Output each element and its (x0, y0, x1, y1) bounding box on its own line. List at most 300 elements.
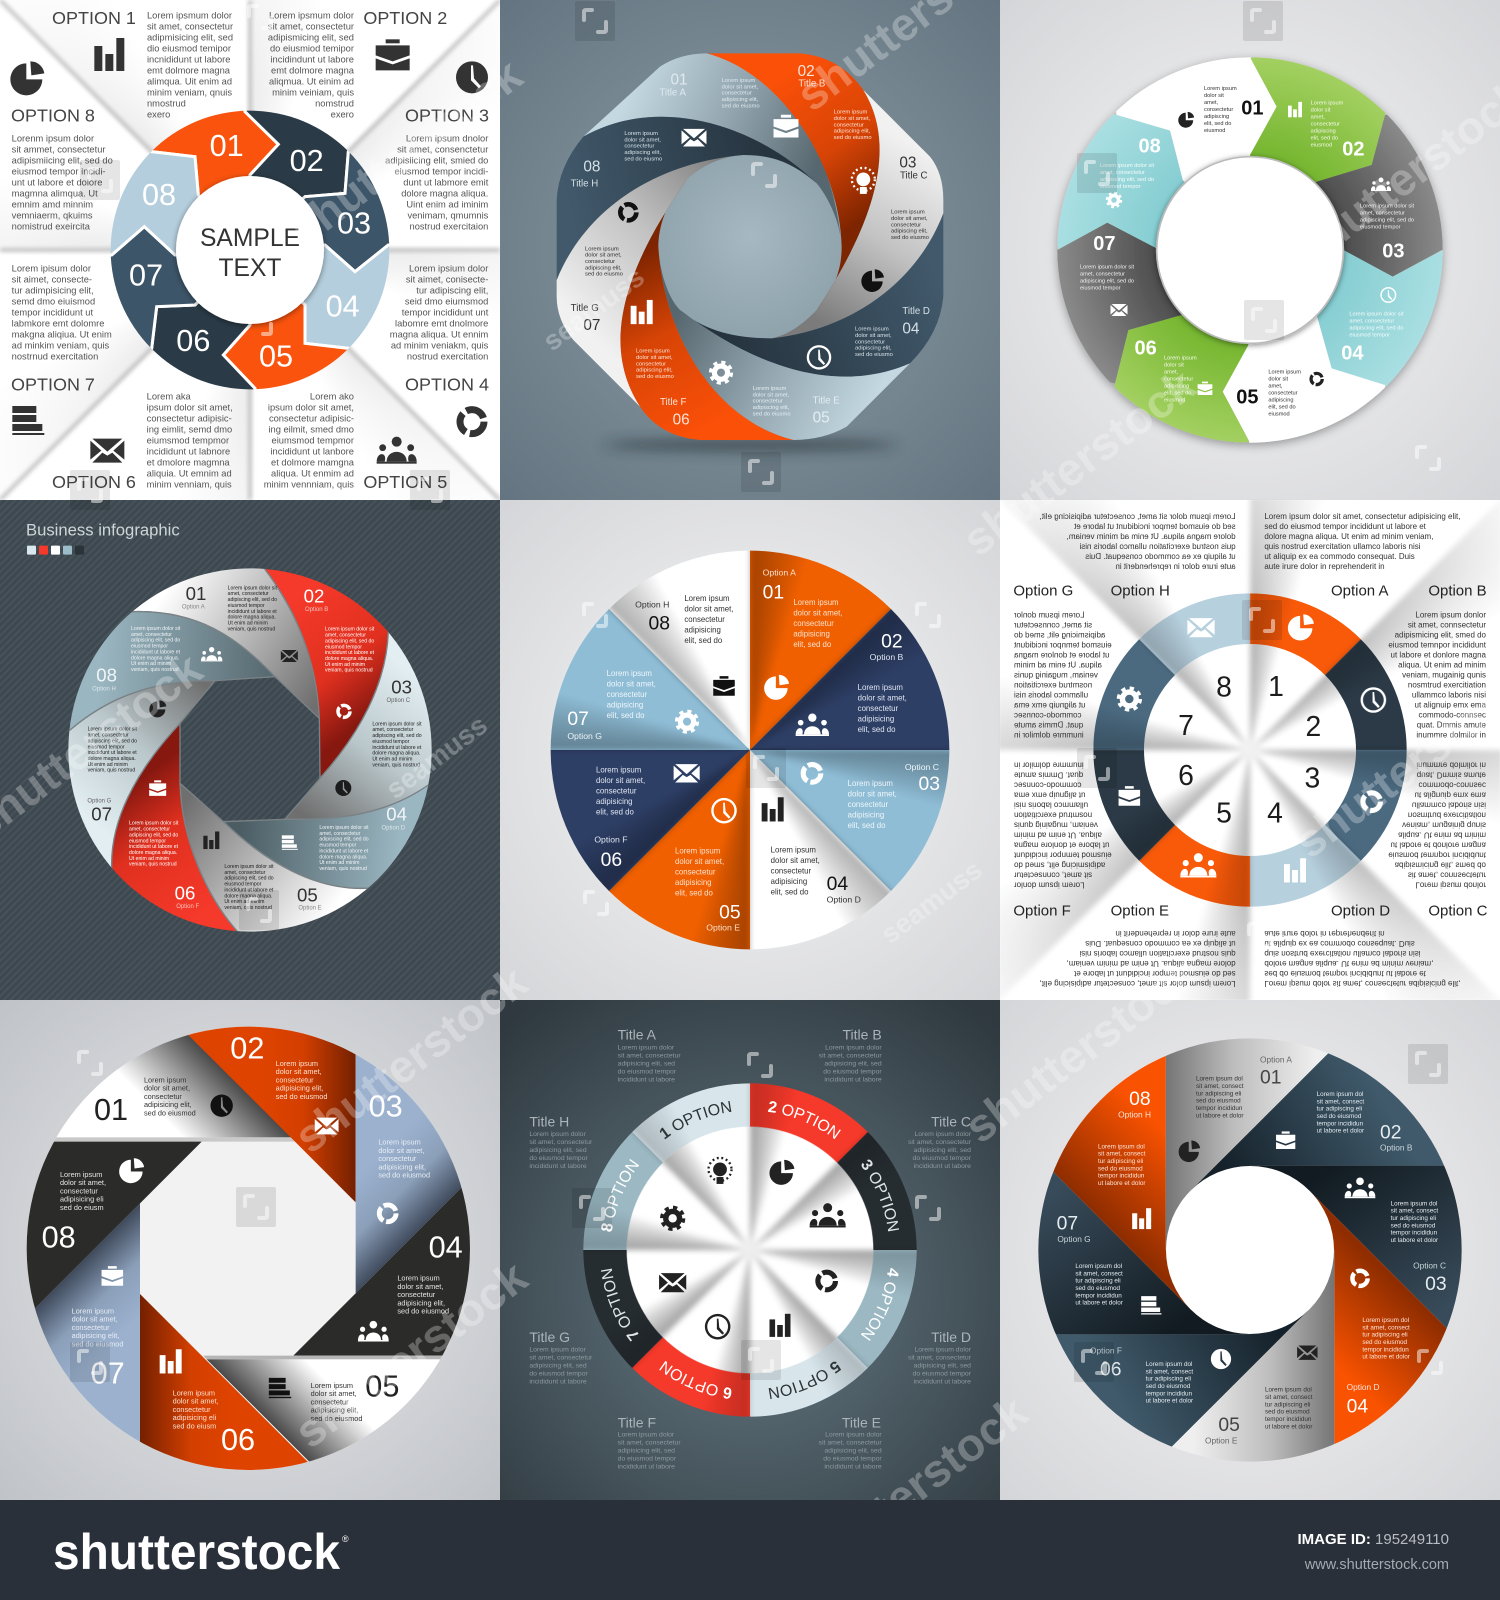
band 06 label (631, 300, 690, 428)
segment 04: sed do eiusmod (1362, 1339, 1407, 1346)
option 5 text: aliqua. Ut enmim ad (271, 469, 354, 479)
right lower flipped paragraph: quat. Dmmis amute (1417, 770, 1487, 779)
segment 04: adipisicing elit, (397, 1298, 445, 1307)
slice 05: adipisicing (675, 878, 712, 887)
blade 02 (304, 586, 375, 717)
option 1 text: Lorem ipsmum dolor (147, 10, 232, 20)
slice 01: Lorem ipsum (793, 598, 839, 607)
segment 08: 08 (42, 1220, 76, 1254)
right upper paragraph: ut labore et donlore magna (1391, 651, 1487, 660)
segment 04: Lorem ipsum (397, 1274, 440, 1283)
segment 04: consectetur (397, 1290, 436, 1299)
blade 01: eiusmod tempor (228, 603, 265, 609)
segment 03 (369, 1090, 430, 1222)
blade 07: eiusmod tempor (88, 744, 125, 750)
option headings: OPTION 4 (405, 375, 489, 395)
watermark text: seamuss (875, 854, 988, 950)
segment 01: amet, (1204, 100, 1219, 106)
band 05 label: dolor sit amet, (753, 392, 790, 398)
segment 05: sit amet, consect (1265, 1394, 1313, 1401)
option headings: OPTION 7 (11, 375, 95, 395)
option 5 text: eiumsmod tempmor (272, 436, 354, 446)
title A block (618, 1026, 681, 1083)
band 06 label: dolor sit amet, (636, 355, 673, 361)
option 7 text: tur adimpisicing elit, (12, 286, 94, 296)
band 01 label: dolor sit amet, (722, 84, 759, 90)
segment 07 (1080, 233, 1134, 316)
option 5 text: minim vennniam, quis (264, 480, 354, 490)
segment 07: consectetur (72, 1323, 110, 1332)
top left mirrored paragraph: aute irure dolor in reprehenderit in (1115, 562, 1236, 571)
blade 05: amet, consectetur (224, 870, 266, 876)
curved option labels: 1 OPTION (660, 1101, 732, 1140)
left upper mirrored paragraph: sit amet, connsectetur (1014, 621, 1092, 630)
title G block: sit amet, consectetur (529, 1355, 593, 1362)
blade 01: dolore magna aliqua. (228, 615, 276, 621)
option 8 text: eiusmod tempor incidi- (12, 167, 106, 177)
segment 06: consectetur (173, 1405, 211, 1414)
footer bar: ® (342, 1534, 349, 1544)
left lower flipped paragraph: commodo-connsec (1014, 780, 1081, 789)
title D block: Title D (931, 1329, 971, 1345)
segment 03: sit amet, consect (1391, 1208, 1438, 1215)
band 04 label: Title D (902, 306, 930, 317)
band 05 label: adipiscing elit, (753, 405, 790, 411)
segment 07: adipisicing elit, (72, 1331, 119, 1340)
segment 05: 05 (365, 1370, 399, 1404)
coloured ring (1093, 594, 1407, 907)
segment 08: sed do eiusm (60, 1203, 104, 1212)
option 5 text: incididunt ut lanbore (270, 447, 354, 457)
blade 04: dolore magna aliqua. (319, 854, 368, 860)
option 4 text: nostrud exercitation (407, 352, 488, 362)
segment 03: sed do eiusmod (378, 1171, 430, 1180)
blade 06: 06 (175, 882, 195, 903)
option 4 text: tur adipiscing elit, (416, 286, 488, 296)
band 07 label: consectetur (585, 259, 615, 265)
slice 06: adipisicing (596, 797, 633, 806)
segment 06: 06 (1135, 337, 1157, 359)
blade 01: Ut enim ad minim (228, 621, 268, 627)
segment 07: Lorem ipsum (72, 1306, 114, 1315)
watermark text: seamuss (537, 261, 650, 357)
segment numbers: 1 (1268, 671, 1284, 703)
blade 05: dolore magna aliqua. (224, 893, 273, 899)
band 02 label: consectetur (834, 122, 864, 128)
right upper paragraph: eiusmod temnpor incididunt (1388, 641, 1487, 650)
right upper paragraph: Lorem ipsum donlor (1415, 611, 1486, 620)
slice 05: consectetur (675, 867, 716, 876)
segment 08: tempor incididun (1098, 1173, 1145, 1180)
option 6 text: aliquia. Ut emnim ad (147, 469, 232, 479)
blade 02: Option B (305, 607, 328, 613)
slice 06: Option F (594, 835, 628, 845)
segment 07: ut labore et dolor (1075, 1300, 1123, 1307)
right upper paragraph: aliqua. Ut enim ad minim (1398, 661, 1486, 670)
option 8 text: Lorenm ipsum dolor (12, 134, 94, 144)
slice 06: consectetur (596, 786, 637, 795)
slice 01: Option A (763, 568, 796, 578)
segment 03: tur adipiscing eli (1391, 1215, 1436, 1222)
ring numbers: 03 (337, 206, 371, 240)
segment 05: Lorem ipsum dol (1265, 1387, 1312, 1394)
blade 01: Lorem ipsum dolor sit (228, 585, 278, 591)
band 06 label: Lorem ipsum (636, 349, 670, 355)
slice 06: Lorem ipsum (596, 765, 641, 774)
segment 08: Lorem ipsum dolor sit (1100, 163, 1154, 169)
ring numbers: 08 (142, 178, 176, 212)
band 02 label: Lorem ipsum (834, 110, 867, 116)
title C block: Lorem ipsum dolor (914, 1131, 972, 1138)
band 08 label: Title H (571, 179, 598, 190)
segment 02: dolor sit (1311, 107, 1331, 113)
right upper paragraph: ullammco laboris nisi (1412, 691, 1486, 700)
blade 08: Lorem ipsum dolor sit (131, 626, 181, 632)
watermark text: seamuss (380, 709, 493, 805)
option 4 text: sit aimet, conisecte- (406, 275, 488, 285)
slice 01: elit, sed do (793, 640, 832, 649)
slice 05: Lorem ipsum (675, 846, 720, 855)
segment 02: 02 (230, 1031, 264, 1065)
segment 07: 07 (91, 1356, 125, 1390)
slice 02: dolor sit amet, (858, 693, 907, 702)
blade 05: 05 (297, 884, 318, 905)
segment 02 (230, 1031, 339, 1134)
slice 05: elit, sed do (675, 888, 714, 897)
slice 07: Option G (567, 731, 602, 741)
blade 05: adipiscing elit, sed do (224, 876, 274, 882)
option 3 text: nostrud exercitaion (410, 222, 488, 232)
right lower flipped paragraph: ullammco laboris nisi (1412, 800, 1486, 809)
slice 02: Option B (870, 652, 904, 662)
blade 04: Option D (382, 825, 406, 831)
curved option labels: 2 OPTION (768, 1101, 841, 1140)
band 05 label: Title E (813, 395, 840, 406)
left lower flipped paragraph: ullammco laboris nisi (1014, 800, 1088, 809)
option 4 text: seid dmo eiumsmod (405, 297, 488, 307)
band 01 label: sed do eiusmo (722, 103, 760, 109)
segment 04: 04 (1341, 342, 1363, 364)
slice 01: dolor sit amet, (793, 608, 843, 617)
slice 01: consectetur (793, 619, 834, 628)
segment 07: 07 (1093, 233, 1115, 255)
band 06 label: adipiscing elit, (636, 368, 673, 374)
segment 07: amet, consectetur (1080, 272, 1125, 278)
option icons (10, 38, 488, 464)
slice 03: elit, sed do (848, 821, 886, 830)
segment 04: Option D (1347, 1382, 1380, 1392)
bottom right flipped paragraph: ut aliquip ex ea commodo consequat. Duis (1264, 939, 1415, 948)
segment 08: amet, consectetur (1100, 170, 1145, 176)
segment 05 (269, 1370, 399, 1423)
slice 08 (635, 594, 735, 696)
segment 08: Option H (1118, 1109, 1151, 1119)
blade 04: 04 (386, 804, 407, 825)
right lower flipped paragraph: eiusmod temnpor incididunt (1388, 850, 1487, 859)
slice 04: Lorem ipsum (771, 846, 816, 855)
title D block: adipisicing elit, sed (914, 1363, 971, 1370)
spiral segments (1038, 1038, 1462, 1462)
blade 03: adipiscing elit, sed do (372, 733, 422, 739)
blade 06 (129, 780, 199, 910)
blade 06: eiusmod tempor (129, 838, 166, 844)
band 05 label: 05 (813, 410, 830, 427)
segment 03: tempor incididun (1391, 1230, 1438, 1237)
option headings (11, 8, 489, 492)
segment 02: adipiscing (1311, 128, 1336, 134)
option 3 text: sit amet, consenctetur (397, 145, 488, 155)
blade 02: eiusmod tempor (325, 644, 362, 650)
blade 03: Ut enim ad minim (372, 757, 412, 763)
blade 04: adipiscing elit, sed do (319, 837, 369, 843)
band 08 label: 08 (583, 159, 600, 176)
blade 05: Option E (298, 905, 322, 911)
segment 03: 03 (1382, 240, 1404, 262)
segment 05: consectetur (1268, 391, 1298, 397)
blade 01: incididunt ut labore et (228, 609, 277, 615)
option 2 text: adipismicing elit, sed (268, 32, 354, 42)
segment 03: sed do eiusmod (1391, 1222, 1436, 1229)
option headings: OPTION 6 (52, 472, 136, 492)
slice 02: elit, sed do (858, 725, 896, 734)
option 6 text: ing eimlit, semd dmo (147, 425, 232, 435)
blade 08: 08 (96, 665, 117, 686)
watermark text: shutterstock (785, 1385, 1037, 1593)
blade 05 (203, 831, 322, 911)
title C block: incididunt ut labore (914, 1163, 971, 1170)
option 2 text: minim veiniam, quis (272, 87, 354, 97)
blade 05: veniam, quis nostrud (224, 905, 272, 911)
footer bar: shutterstock (53, 1524, 340, 1580)
blade 07: Option G (87, 799, 112, 805)
segment 02: tempor incididun (1317, 1120, 1364, 1127)
blade 06: amet, consectetur (129, 827, 170, 833)
blade 03: 03 (391, 676, 412, 697)
segment 02 (1276, 1091, 1413, 1153)
segment 06: tur adipiscing eli (1146, 1376, 1191, 1383)
band 07 label: 07 (583, 317, 600, 334)
option 5 text: consectetur adipisic- (269, 414, 354, 424)
slice 07: adipisicing (607, 700, 643, 709)
left upper mirrored paragraph: inummre dolmilor in (1014, 731, 1084, 740)
band 06 label: 06 (673, 411, 690, 428)
bottom right flipped paragraph: Lorem ipsum dolor sit amet, consectetur adipisicing elit, (1264, 979, 1460, 988)
option labels: Option C (1428, 903, 1488, 920)
ring numbers: 05 (259, 340, 293, 374)
option 6 text: ipsum dolor sit amet, (147, 403, 233, 413)
band 06 label: consectetur (636, 361, 666, 367)
slice 08: Lorem ipsum (684, 594, 730, 603)
segment 03: Lorem ipsum dol (1391, 1200, 1437, 1207)
watermark marks (70, 1, 1448, 1382)
segment 03: ut labore et dolor (1391, 1237, 1438, 1244)
segment 02: tur adipiscing eli (1317, 1106, 1362, 1113)
ring numbers: 06 (176, 324, 210, 358)
wheel ring (583, 1083, 917, 1417)
blade 05: Ut enim ad minim (224, 899, 264, 905)
segment 04: tur adipiscing eli (1362, 1332, 1408, 1339)
option 4 text: tempor incididunt unt (402, 308, 489, 318)
segment 05: consectetur (311, 1397, 349, 1406)
option 1 text: sit amet, consectetur (147, 21, 233, 31)
title B block: incididunt ut labore (824, 1076, 882, 1083)
blade 04: eiusmod tempor (319, 843, 357, 849)
title H block: adipisicing elit, sed (529, 1147, 587, 1154)
segment 01: consectetur (144, 1092, 182, 1101)
segment 05: adipisicing elit, (311, 1406, 358, 1415)
segment 06: elit, sed do (1164, 390, 1191, 396)
option 2 text: emt dolmore magna (271, 65, 355, 75)
segment 06 (160, 1349, 255, 1457)
title A block: do eiusmod tempor (618, 1068, 677, 1075)
blade 04: veniam, quis nostrud (319, 866, 367, 872)
blade 03: veniam, quis nostrud (372, 762, 420, 768)
slice 05: dolor sit amet, (675, 857, 724, 866)
left lower flipped paragraph: ut alignuip emx ema (1013, 790, 1085, 799)
ring numbers: 02 (290, 144, 324, 178)
option 8 text: sit ammet, consectetur (12, 145, 106, 155)
segment 01: eiusmod (1204, 128, 1225, 134)
option 6 text: minim venniam, quis (147, 480, 232, 490)
title A block: Lorem ipsum dolor (618, 1044, 675, 1051)
right upper paragraph: veniam, mugainig qunis (1402, 671, 1486, 680)
top left mirrored paragraph: sed do eiusmod tempor incididunt ut labore et (1073, 522, 1236, 531)
segment numbers: 4 (1267, 798, 1283, 830)
segment 03: eiusmod tempor (1360, 224, 1401, 230)
segment 07 (1057, 1213, 1161, 1314)
bottom right flipped paragraph: quis nostrud exercitation ullamco laboris nisi (1264, 949, 1421, 958)
band 01 label: 01 (670, 71, 688, 88)
segment 02: Option B (1380, 1143, 1413, 1153)
centre circle with sample text (176, 176, 324, 324)
title F block: Title F (618, 1414, 656, 1430)
segment 05: dolor sit (1268, 377, 1289, 383)
segment 05: dolor sit amet, (311, 1389, 357, 1398)
blade 06: Option F (176, 904, 199, 910)
title B block: adipisicing elit, sed (824, 1060, 882, 1067)
slice 04: Option D (827, 895, 861, 905)
option 2 text: Lorem ipsmum dolor (269, 10, 354, 20)
option 7 text: labmkore emt dolomre (12, 319, 104, 329)
left upper mirrored paragraph: nosmtrud exercitiation (1014, 681, 1092, 690)
band 04 label (807, 306, 930, 370)
option 2 text: exero (331, 109, 354, 119)
slice 05 (675, 798, 741, 933)
slice 08: dolor sit amet, (684, 604, 734, 613)
bottom left flipped paragraph: quis nostrud exercitation ullamco laboris nisi (1079, 949, 1236, 958)
segment 01: 01 (94, 1093, 128, 1127)
panel 4: striped dark background with shutter circle (0, 500, 500, 1000)
panel 6: folded white sheet with numbered ring (883, 383, 1500, 1117)
slice 05: Option E (706, 923, 740, 933)
option 1 text: alimqua. Uit enim ad (147, 76, 232, 86)
option 7 text: semd dmo eiuismod (12, 297, 95, 307)
segment 05: sed do eiusmod (311, 1414, 362, 1423)
band 03 label: adipiscing elit, (891, 229, 928, 235)
blade 08: veniam, quis nostrud (131, 667, 179, 673)
slice 02: Lorem ipsum (858, 683, 903, 692)
band 02 label: adipiscing elit, (834, 129, 871, 135)
segment 01 (1178, 86, 1263, 134)
left upper mirrored paragraph: Lorem ipsum donlor (1014, 611, 1085, 620)
segment 06 (1135, 337, 1212, 403)
right upper paragraph: sit amet, connsectetur (1408, 621, 1486, 630)
blade 08: Option H (92, 686, 116, 692)
band 04 label: 04 (902, 320, 920, 337)
band 08 label: Lorem ipsum (624, 131, 658, 137)
segment 05: adipiscing (1268, 398, 1293, 404)
blade 06: incididunt ut labore et (129, 844, 179, 850)
title E block: Lorem ipsum dolor (825, 1432, 882, 1439)
segment 02: sit amet, consect (1317, 1098, 1364, 1105)
title H block: sit amet, consectetur (529, 1139, 593, 1146)
segment 05: tempor incididun (1265, 1416, 1312, 1423)
segment 02: Lorem ipsum (276, 1059, 318, 1068)
segment 02: Lorem ipsum dol (1317, 1091, 1363, 1098)
band 07 label: sed do eiusmo (585, 272, 623, 278)
right lower flipped paragraph: Lorem ipsum donlor (1415, 880, 1486, 889)
band 03 label: Title C (900, 171, 928, 182)
segment numbers: 6 (1178, 760, 1194, 792)
blade 07: Ut enim ad minim (88, 762, 128, 768)
title G block (529, 1329, 593, 1386)
segment 03: consectetur (378, 1154, 417, 1163)
curved option labels: 8 OPTION (601, 1159, 639, 1232)
band 08 label (571, 129, 706, 190)
top left mirrored paragraph: Lorem ipsum dolor sit amet, consectetur adipisicing elit, (1040, 512, 1236, 521)
title A block: incididunt ut labore (618, 1076, 675, 1083)
title E block: Title E (842, 1414, 881, 1430)
arrow ring segments (1052, 54, 1448, 451)
slice 04: elit, sed do (771, 888, 809, 897)
segment 08: sed do eiusmod (1098, 1165, 1143, 1172)
left lower flipped paragraph: veniam, mugainig qunis (1014, 820, 1098, 829)
slice 05: 05 (719, 902, 741, 923)
segment 06: sed do eiusmod (1146, 1383, 1191, 1390)
bottom left flipped paragraph: ut aliquip ex ea commodo consequat. Duis (1085, 939, 1236, 948)
right lower flipped paragraph: inummre dolmilor in (1416, 760, 1486, 769)
segment 07: tur adipiscing eli (1075, 1278, 1121, 1285)
title C block: Title C (931, 1114, 971, 1130)
blade 05: incididunt ut labore et (224, 887, 274, 893)
segment 01: sed do eiusmod (1196, 1098, 1241, 1105)
segment 01: Lorem ipsum dol (1196, 1076, 1243, 1083)
segment 06: adipiscing (1164, 383, 1189, 389)
slice 01: adipisicing (793, 629, 830, 638)
segment 06: dolor sit (1164, 362, 1184, 368)
segment 08: tur adipiscing eli (1098, 1158, 1143, 1165)
option 8 text: unt ut labore et dolore (12, 178, 102, 188)
title D block (908, 1329, 972, 1386)
segment 05: Lorem ipsum (311, 1381, 353, 1390)
band 08 label: sed do eiusmo (624, 156, 662, 162)
title E block: do eiusmod tempor (823, 1456, 882, 1463)
segment 05: tur adipiscing eli (1265, 1401, 1310, 1408)
segment 01: Lorem ipsum (144, 1075, 186, 1084)
right upper paragraph: nosmtrud exercitiation (1408, 681, 1486, 690)
blade 07: Lorem ipsum dolor sit (88, 727, 138, 733)
option 8 text: vemniaerm, qkuims (12, 211, 93, 221)
segment 06: dolor sit amet, (173, 1397, 219, 1406)
slice 07: Lorem ipsum (607, 669, 652, 678)
title F block: sit amet, consectetur (618, 1440, 681, 1447)
title F block (618, 1414, 681, 1471)
band 03 label: sed do eiusmo (891, 235, 929, 241)
left upper mirrored paragraph: commodo-connsec (1014, 711, 1081, 720)
option 4 text: Lorem ipsium dolor (409, 264, 488, 274)
segment 06: adipisicing eli (173, 1413, 217, 1422)
option 8 text: nomistrud exeircita (12, 222, 91, 232)
